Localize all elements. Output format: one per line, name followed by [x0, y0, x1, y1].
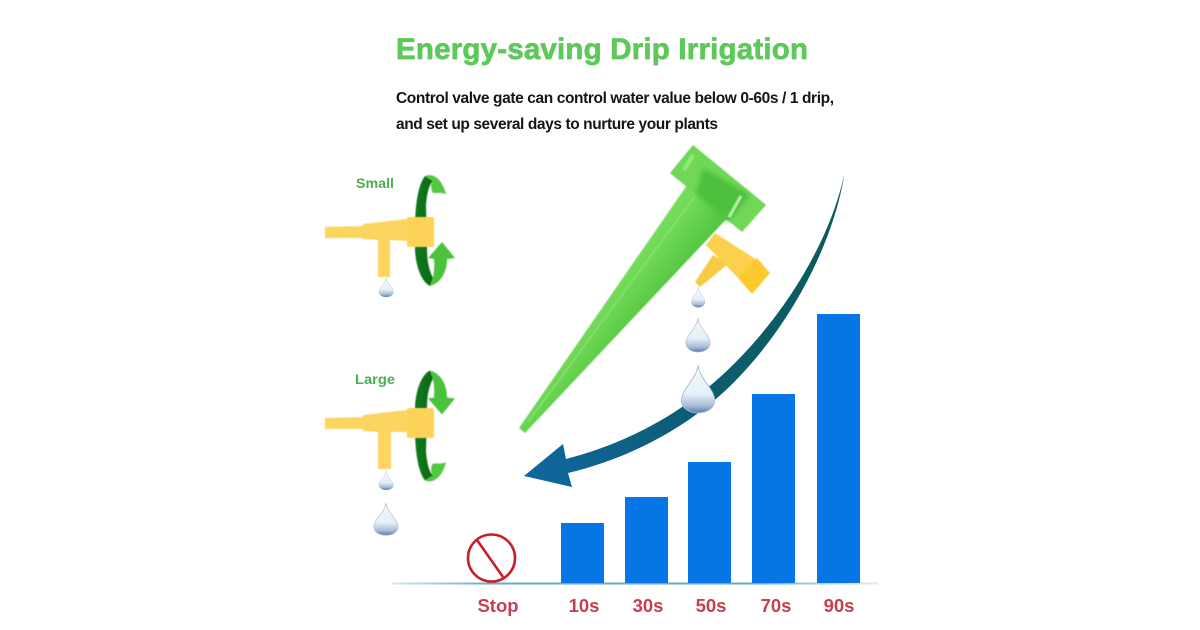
axis labels: 90s	[824, 595, 854, 616]
description text: and set up several days to nurture your plants	[396, 116, 718, 133]
icon: water drop small	[379, 471, 393, 490]
icon: yellow valve	[695, 233, 770, 294]
icon: stop sign	[468, 534, 515, 582]
bar: 50s	[688, 462, 731, 583]
large flow diagram	[325, 370, 455, 535]
icon: water drop 2	[686, 318, 710, 352]
bar: 70s	[752, 394, 795, 583]
label: Large: Large	[355, 371, 395, 387]
icon: green spike body	[519, 146, 765, 433]
bar: 30s	[625, 497, 668, 583]
axis labels: Stop	[477, 595, 519, 616]
small flow diagram	[325, 175, 455, 297]
icon: water drop 1	[692, 287, 705, 307]
icon: rotation arrow up	[415, 175, 455, 286]
description text: Control valve gate can control water value below 0-60s / 1 drip,	[396, 90, 834, 107]
icon: water drop	[379, 278, 393, 297]
bar: 90s	[817, 314, 860, 583]
axis labels: 30s	[633, 595, 663, 616]
axis labels: 70s	[761, 595, 791, 616]
curved arrow	[524, 176, 844, 487]
axis labels: 10s	[569, 595, 599, 616]
title: Energy-saving Drip Irrigation	[396, 33, 808, 66]
axis labels: 50s	[696, 595, 726, 616]
label: Small: Small	[356, 175, 394, 191]
bar: 10s	[561, 523, 604, 583]
icon: rotation arrow down	[415, 370, 455, 481]
spike with valve and drops	[519, 146, 770, 433]
axis labels	[477, 595, 854, 616]
icon: water drop 3	[682, 365, 715, 413]
description text	[396, 90, 834, 133]
icon: water drop large	[374, 503, 398, 535]
bar chart	[392, 314, 878, 616]
baseline	[392, 582, 878, 584]
icon: yellow valve	[325, 408, 434, 469]
icon: yellow valve	[325, 217, 434, 277]
